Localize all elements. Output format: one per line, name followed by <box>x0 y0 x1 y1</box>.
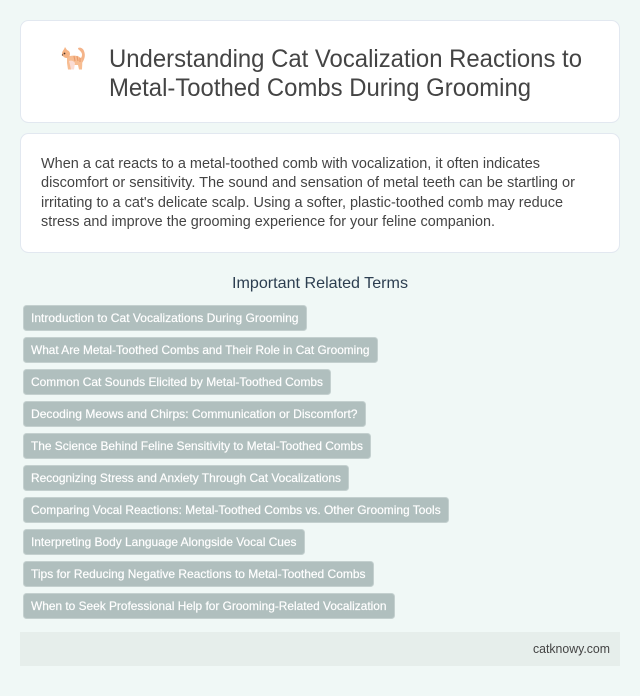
tag 6 <box>24 466 348 490</box>
footer bar <box>20 632 620 666</box>
panel: summary paragraph <box>20 134 620 252</box>
text block: summary: When a cat reacts to a metal-toothed comb with vocalization, it often indicates <box>41 156 540 172</box>
title: Metal-Toothed Combs During Grooming <box>109 74 531 102</box>
tag list <box>24 306 448 618</box>
icon: cat <box>62 47 85 70</box>
panel: title card <box>20 20 620 122</box>
tag 8 <box>24 530 304 554</box>
tag 8: Interpreting Body Language Alongside Vocal Cues <box>31 535 296 549</box>
tag 4 <box>24 402 366 426</box>
tag 1 <box>24 306 306 330</box>
tag 10: When to Seek Professional Help for Grooming-Related Vocalization <box>31 599 386 613</box>
tag 5 <box>24 434 370 458</box>
tag 4: Decoding Meows and Chirps: Communication or Discomfort? <box>31 407 358 421</box>
tag 2: What Are Metal-Toothed Combs and Their Role in Cat Grooming <box>31 343 370 357</box>
tag 3: Common Cat Sounds Elicited by Metal-Toothed Combs <box>31 375 323 389</box>
tag 10 <box>24 594 394 618</box>
title <box>109 45 582 102</box>
title: Understanding Cat Vocalization Reactions to <box>109 45 582 73</box>
tag 9 <box>24 562 374 586</box>
tag 6: Recognizing Stress and Anxiety Through Cat Vocalizations <box>31 471 341 485</box>
tag 3 <box>24 370 330 394</box>
tag 5: The Science Behind Feline Sensitivity to Metal-Toothed Combs <box>31 439 363 453</box>
text block: summary: irritating to a cat's delicate scalp. Using a softer, plastic-toothed comb may reduce <box>41 195 563 211</box>
text block: summary: discomfort or sensitivity. The sound and sensation of metal teeth can be startling or <box>41 175 575 191</box>
tag 7: Comparing Vocal Reactions: Metal-Toothed Combs vs. Other Grooming Tools <box>31 503 441 517</box>
tag 1: Introduction to Cat Vocalizations During Grooming <box>31 311 298 325</box>
tag 2 <box>24 338 378 362</box>
heading: important related terms: Important Related Terms <box>232 275 408 292</box>
footer: site name: catknowy.com <box>533 642 610 656</box>
text block: summary: stress and improve the grooming experience for your feline companion. <box>41 214 495 230</box>
tag 7 <box>24 498 448 522</box>
tag 9: Tips for Reducing Negative Reactions to Metal-Toothed Combs <box>31 567 366 581</box>
text block: summary <box>41 156 575 230</box>
